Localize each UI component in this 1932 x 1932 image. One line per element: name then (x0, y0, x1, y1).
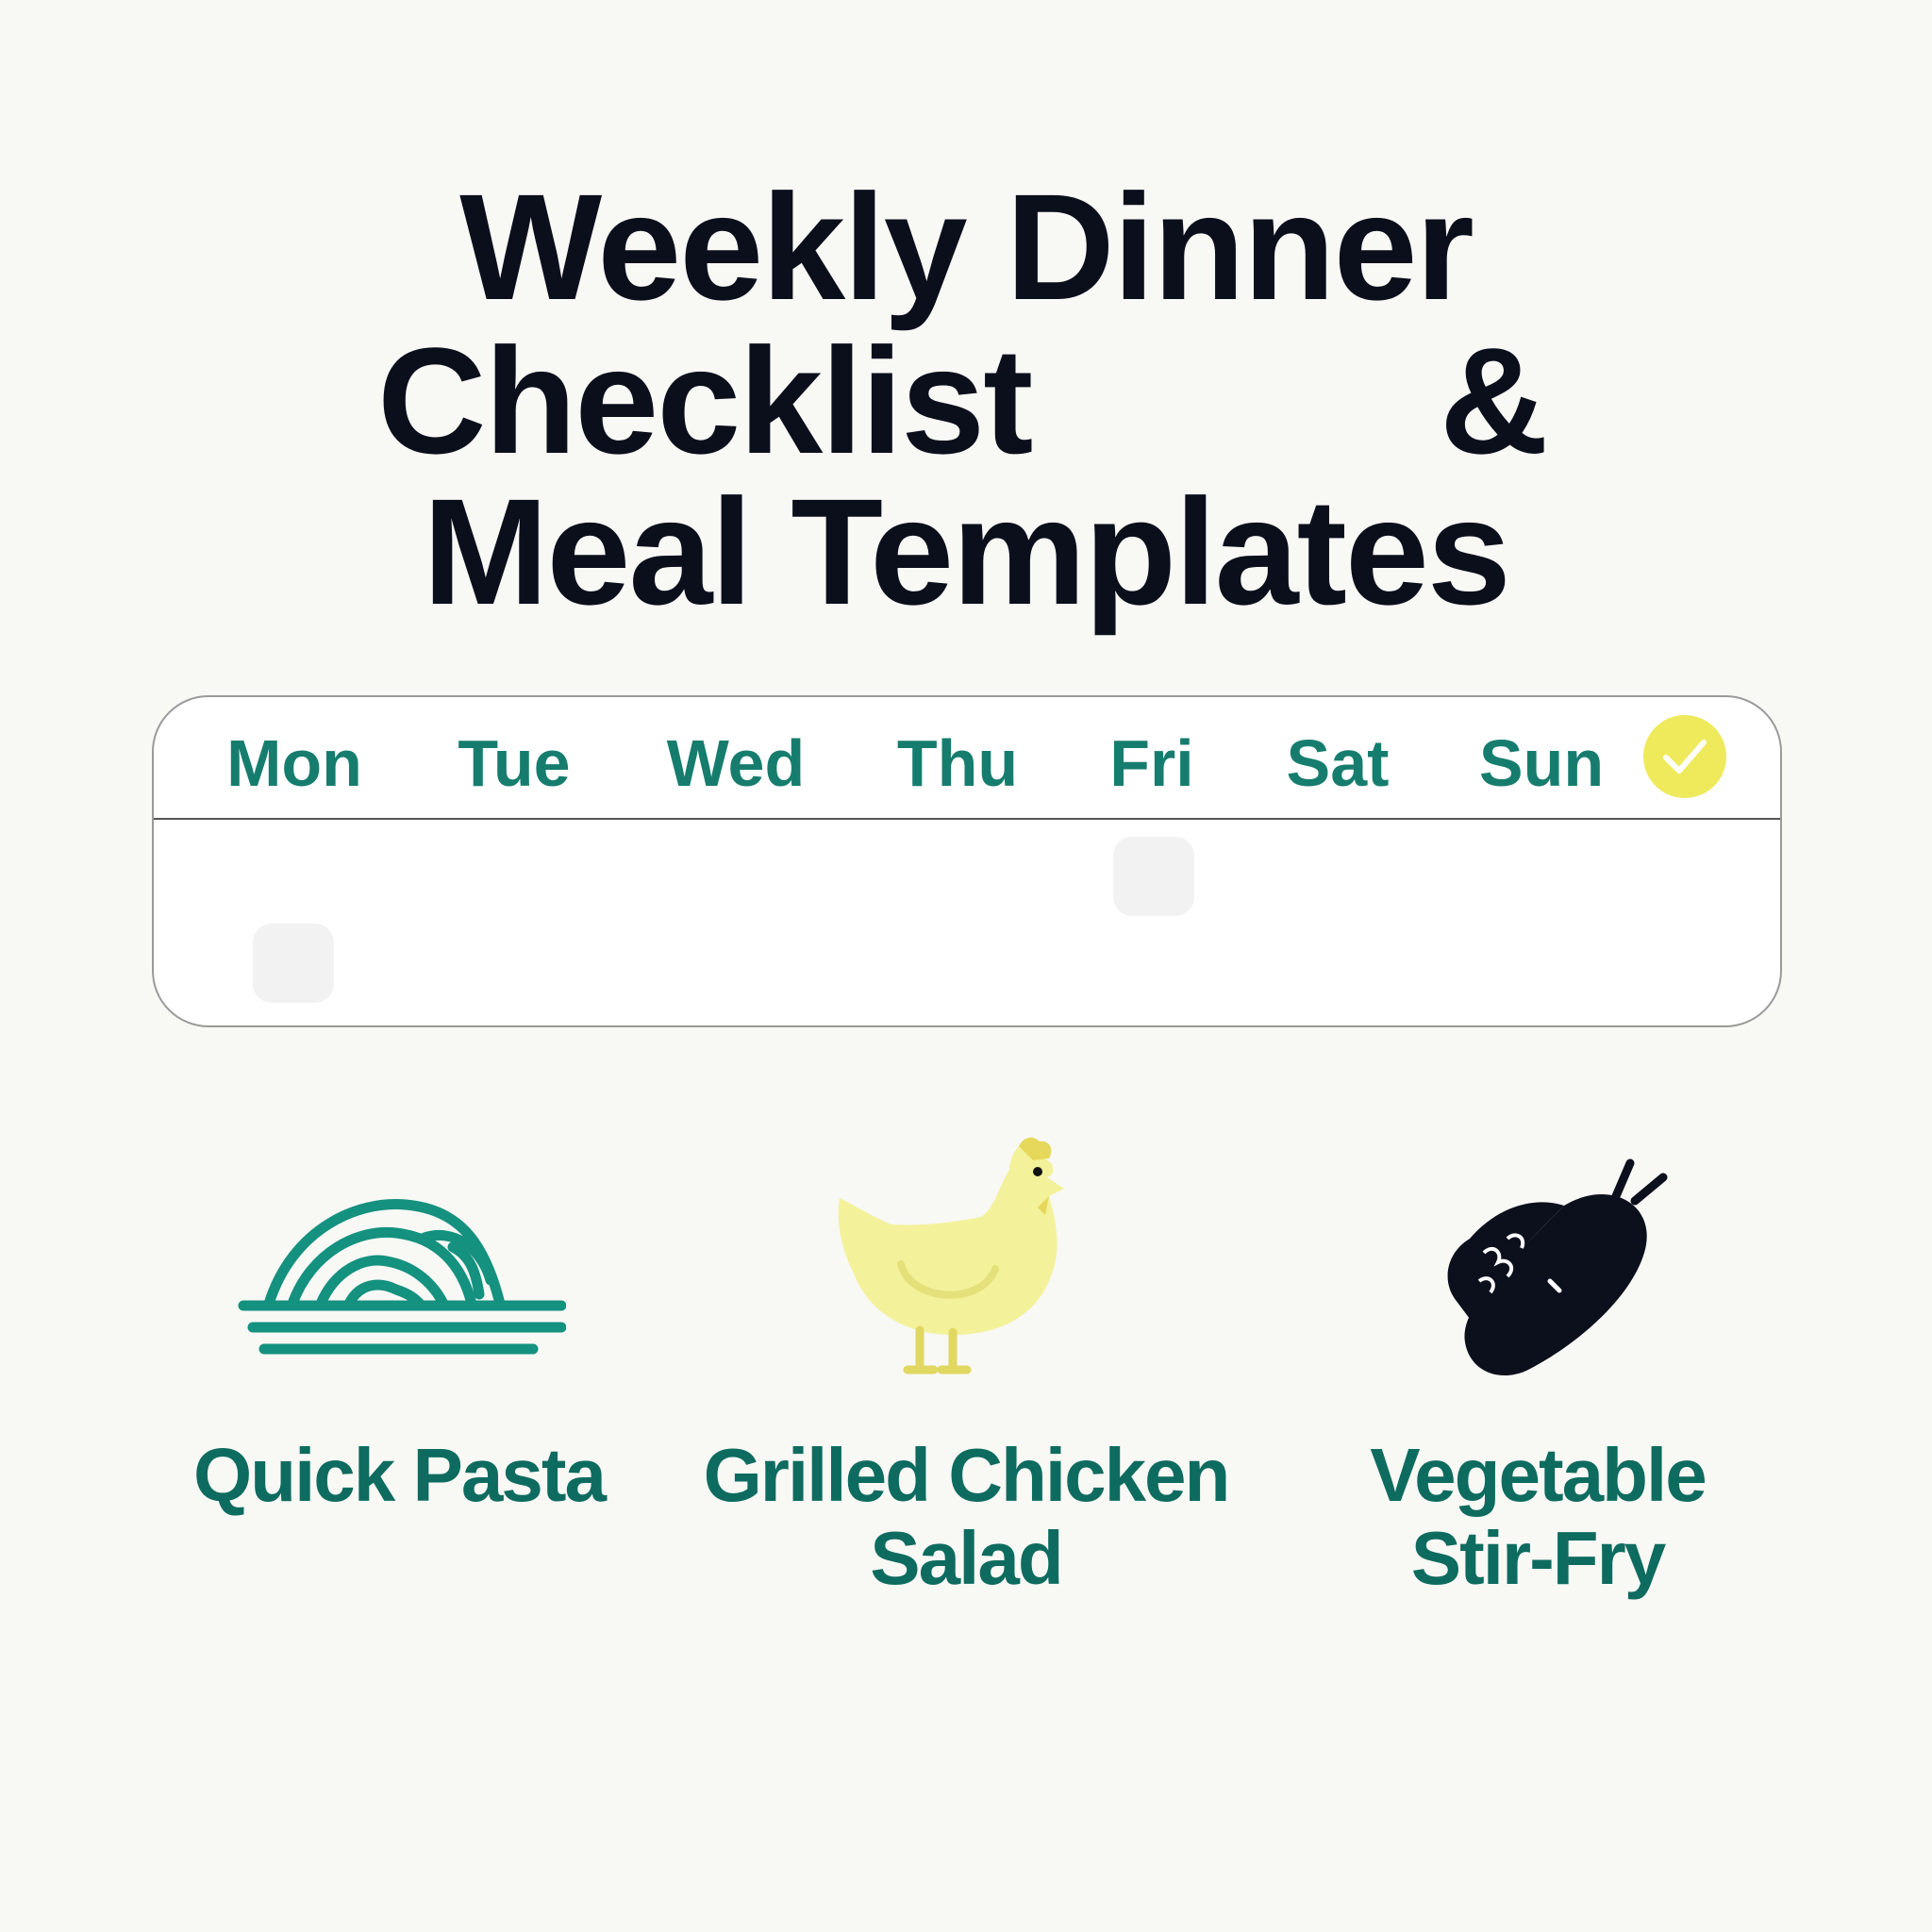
empty cell Mon (253, 924, 334, 1003)
icon: pasta (238, 1199, 566, 1355)
empty cell Fri (1113, 837, 1194, 916)
day labels: Tue (458, 726, 571, 800)
title: Weekly Dinner (459, 162, 1473, 331)
label: Vegetable Stir-Fry: Stir-Fry (1411, 1516, 1664, 1600)
label: Grilled Chicken Salad: Salad (870, 1516, 1062, 1600)
label: Grilled Chicken Salad: Grilled Chicken (704, 1433, 1228, 1517)
title (377, 162, 1547, 636)
header divider (154, 818, 1780, 820)
title: Checklist (377, 316, 1031, 485)
day labels: Sat (1287, 726, 1389, 800)
day labels: Sun (1479, 726, 1604, 800)
icon: chicken (838, 1138, 1064, 1374)
title: & (1440, 316, 1547, 485)
label: Quick Pasta: Quick Pasta (193, 1433, 605, 1517)
day labels (226, 726, 1604, 800)
title: Meal Templates (423, 467, 1509, 636)
day labels: Mon (226, 726, 362, 800)
day labels: Fri (1109, 726, 1194, 800)
label: Vegetable Stir-Fry: Vegetable (1370, 1433, 1706, 1517)
day labels: Thu (897, 726, 1018, 800)
label: Vegetable Stir-Fry (1370, 1433, 1706, 1600)
panel: weekly checklist (152, 695, 1782, 1027)
icon: vegetable stir-fry (1447, 1158, 1668, 1375)
day labels: Wed (667, 726, 805, 800)
icon: check circle (1643, 715, 1726, 798)
label: Grilled Chicken Salad (704, 1433, 1228, 1600)
